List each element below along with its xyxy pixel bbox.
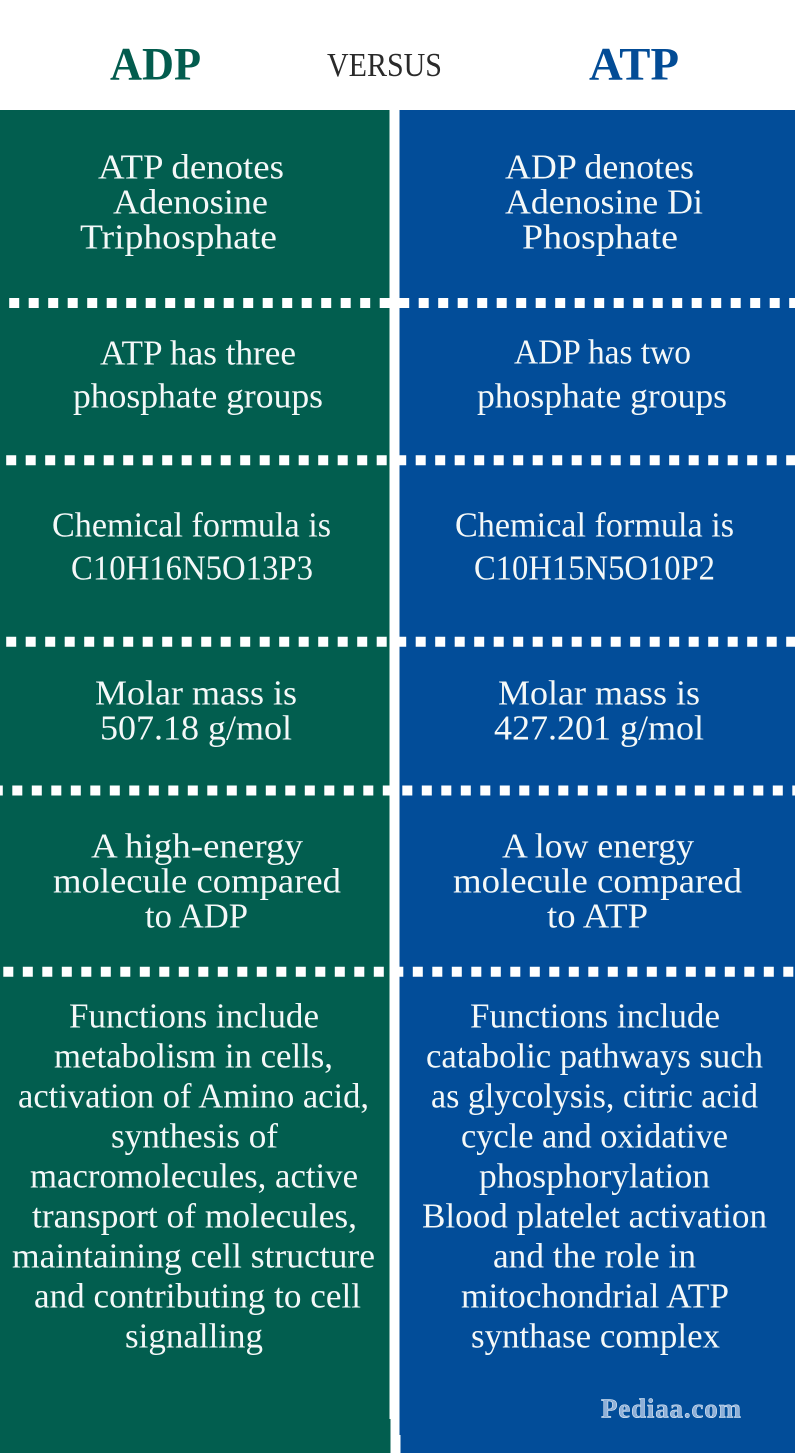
- ADP row 6: functions: signalling: [125, 1318, 263, 1356]
- ADP row 6: functions: Functions include: [69, 998, 319, 1036]
- ATP row 1: denotes: [505, 149, 703, 257]
- watermark: Pediaa.com: Pediaa.com: [601, 1394, 742, 1424]
- ADP row 4: molar mass: 507.18 g/mol: [100, 710, 292, 748]
- ATP row 2: phosphate groups: ADP has two: [514, 334, 691, 372]
- ATP row 4: molar mass: [494, 675, 704, 748]
- ATP row 6: functions: as glycolysis, citric acid: [431, 1078, 758, 1116]
- ADP row 5: energy: A high-energy: [91, 828, 304, 866]
- ADP row 6: functions: metabolism in cells,: [54, 1038, 333, 1076]
- ADP row 1: denotes: [80, 149, 284, 257]
- ADP row 1: denotes: Adenosine: [113, 184, 268, 222]
- ATP row 6: functions: [422, 998, 767, 1356]
- ATP row 5: energy: A low energy: [502, 828, 695, 866]
- ADP row 4: molar mass: Molar mass is: [95, 675, 297, 713]
- ATP row 3: chemical formula: [455, 506, 734, 587]
- ATP row 5: energy: molecule compared: [453, 863, 742, 901]
- ATP row 6: functions: cycle and oxidative: [461, 1118, 728, 1156]
- ATP row 1: denotes: Adenosine Di: [505, 184, 703, 222]
- ADP row 6: functions: activation of Amino acid,: [18, 1078, 369, 1116]
- ADP row 3: chemical formula: [52, 506, 331, 587]
- title: ADP: ADP: [110, 38, 201, 90]
- ADP row 3: chemical formula: Chemical formula is: [52, 506, 331, 544]
- ADP row 6: functions: maintaining cell structure: [12, 1238, 375, 1276]
- ADP row 4: molar mass: [95, 675, 297, 748]
- ATP row 6: functions: synthase complex: [471, 1318, 720, 1356]
- ATP row 6: functions: Functions include: [470, 998, 720, 1036]
- ADP row 6: functions: macromolecules, active: [30, 1158, 358, 1196]
- ADP row 1: denotes: ATP denotes: [98, 149, 284, 187]
- ADP row 6: functions: transport of molecules,: [32, 1198, 357, 1236]
- ADP row 5: energy: molecule compared: [53, 863, 341, 901]
- ADP row 3: chemical formula: C10H16N5O13P3: [71, 549, 313, 587]
- title: ATP: ATP: [589, 38, 679, 90]
- ATP row 4: molar mass: Molar mass is: [498, 675, 700, 713]
- ATP row 3: chemical formula: Chemical formula is: [455, 506, 734, 544]
- title: versus: VERSUS: [327, 47, 442, 84]
- ATP row 6: functions: catabolic pathways such: [426, 1038, 763, 1076]
- ADP row 2: phosphate groups: ATP has three: [100, 335, 296, 373]
- ATP row 1: denotes: ADP denotes: [505, 149, 694, 187]
- panel: ADP column: [0, 110, 390, 1453]
- ATP row 4: molar mass: 427.201 g/mol: [494, 710, 704, 748]
- ADP row 2: phosphate groups: phosphate groups: [73, 378, 323, 416]
- ADP row 6: functions: [12, 998, 375, 1356]
- ADP row 2: phosphate groups: [73, 335, 323, 416]
- ATP row 2: phosphate groups: phosphate groups: [477, 378, 727, 416]
- ADP row 1: denotes: Triphosphate: [80, 219, 277, 257]
- ADP row 6: functions: and contributing to cell: [34, 1278, 361, 1316]
- ADP row 5: energy: [53, 828, 341, 936]
- ADP row 6: functions: synthesis of: [111, 1118, 279, 1156]
- ATP row 5: energy: [453, 828, 742, 936]
- ATP row 1: denotes: Phosphate: [522, 219, 678, 257]
- ATP row 6: functions: mitochondrial ATP: [461, 1278, 729, 1316]
- ATP row 3: chemical formula: C10H15N5O10P2: [474, 549, 715, 587]
- panel: ATP column: [400, 110, 795, 1453]
- ATP row 5: energy: to ATP: [547, 898, 648, 936]
- ATP row 6: functions: phosphorylation: [479, 1158, 710, 1196]
- ATP row 6: functions: Blood platelet activation: [422, 1198, 767, 1236]
- ATP row 6: functions: and the role in: [493, 1238, 696, 1276]
- ATP row 2: phosphate groups: [477, 334, 727, 416]
- ADP row 5: energy: to ADP: [145, 898, 248, 936]
